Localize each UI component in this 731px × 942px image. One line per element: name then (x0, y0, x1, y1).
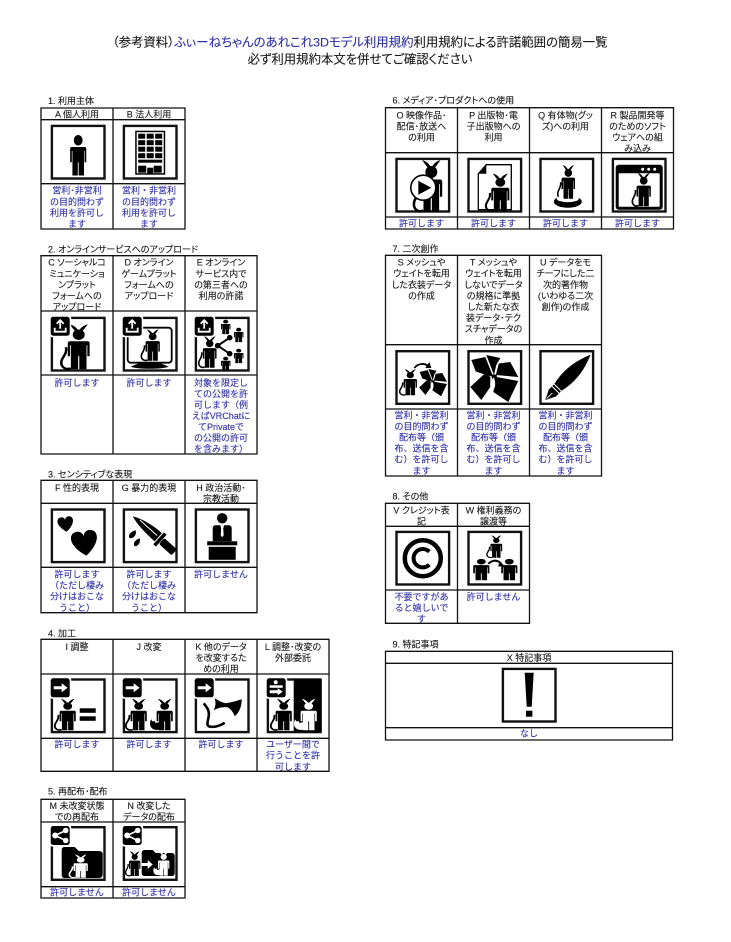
permission text: 行うことを許 (266, 750, 320, 761)
permission text: 分けはおこな (122, 592, 176, 602)
table grid (386, 503, 530, 623)
permission text: 営利・非営利 (122, 185, 176, 196)
column headers: の規格に準拠 (467, 290, 520, 301)
icon: building (124, 126, 176, 178)
permission text (399, 218, 660, 229)
column headers: の利用 (408, 132, 435, 142)
permission text: の目的問わず (122, 196, 176, 207)
column headers: R 製品開発等 (610, 109, 665, 120)
column headers (50, 800, 175, 822)
column headers: した新たな衣 (468, 301, 519, 312)
permission text: （ただし棲み (122, 580, 176, 590)
column headers: P 出版物･電 (469, 109, 518, 120)
column headers: G 暴力的表現 (122, 482, 176, 493)
table grid (41, 108, 185, 229)
column headers: データの配布 (123, 811, 175, 822)
permission text: 対象を限定し (194, 377, 248, 388)
permission text: す (417, 614, 426, 624)
column headers: スチャデータの (464, 323, 522, 334)
column headers: M 未改変状態 (50, 800, 104, 811)
column headers: T メッシュや (470, 258, 517, 268)
column headers: チーフにした二 (536, 269, 594, 279)
column headers (48, 258, 248, 312)
column headers: O 映像作品･ (396, 109, 447, 120)
table grid (41, 256, 257, 454)
panel: 9. 特記事項 (386, 638, 672, 740)
table grid (41, 480, 257, 613)
column headers: した衣装データ (392, 279, 451, 290)
column headers (396, 109, 666, 154)
column headers: 配信･放送へ (397, 120, 446, 131)
column headers: しないでデータ (464, 279, 523, 290)
heading: 5. 再配布･配布 (48, 786, 108, 796)
permission text: 許可します (615, 218, 660, 229)
permission text: ての公開を許 (194, 388, 248, 399)
column headers: アップロード (53, 302, 101, 312)
column headers (393, 504, 522, 526)
column headers: S メッシュや (398, 258, 446, 268)
permission text: 可します（例 (194, 399, 248, 410)
column headers: ゲームプラット (121, 268, 177, 279)
heading: 7. 二次創作 (392, 243, 439, 254)
permission text: なし (520, 729, 538, 739)
column headers: 子出版物への (467, 120, 521, 131)
permission text (50, 887, 176, 898)
permission text: 配布等（頒 (399, 432, 444, 442)
column headers: サービス内で (195, 268, 247, 279)
column headers: 装データ･テク (466, 312, 521, 323)
permission text: ます (140, 219, 158, 229)
heading: 2. オンラインサービスへのアップロード (48, 244, 198, 254)
column headers: H 政治活動･ (196, 482, 246, 493)
permission text: 許可します (543, 218, 588, 229)
heading: 4. 加工 (48, 628, 76, 638)
permission text: ます (556, 466, 575, 476)
column headers: F 性的表現 (55, 482, 99, 493)
table grid (41, 639, 329, 771)
column headers: ンプラット (58, 280, 96, 290)
panel: 3. センシティブな表現 (41, 468, 257, 613)
permission text: 許可しません (467, 591, 520, 602)
permission text (394, 409, 593, 476)
column headers: 譲渡等 (480, 515, 507, 526)
column headers: アップロード (125, 291, 173, 301)
permission text: の目的問わず (538, 420, 593, 431)
icon: outsourcing (265, 677, 322, 732)
icon: hearts (52, 510, 104, 562)
permission text: 許可しません (122, 887, 176, 898)
heading: 3. センシティブな表現 (48, 468, 132, 480)
column headers: W 権利義務の (466, 504, 522, 515)
permission text (394, 591, 520, 624)
icon: other data (193, 677, 248, 732)
table grid (41, 799, 185, 898)
icon: copyright (396, 532, 449, 584)
column headers: B 法人利用 (127, 109, 171, 120)
panel: 8. その他 (386, 490, 530, 624)
column headers: ズ)への利用 (542, 120, 589, 131)
permission text: む）を許可し (538, 454, 593, 465)
column headers: (いわゆる二次 (538, 290, 593, 301)
column headers: D オンライン (124, 258, 174, 268)
icon: upload to game (121, 315, 176, 370)
permission text (50, 568, 248, 613)
column headers: の第三者への (194, 279, 248, 290)
column headers: Q 有体物(グッ (538, 109, 593, 120)
permission text: 配布等（頒 (543, 432, 588, 442)
column headers: I 調整 (65, 641, 89, 652)
column headers: 記 (417, 516, 426, 526)
icon: podium speaker (196, 510, 248, 562)
icon: upload to social (49, 315, 104, 370)
permission text: の公開の許可 (194, 432, 248, 443)
permission text: ます (412, 466, 431, 476)
permission text: 布、送信を含 (394, 443, 449, 454)
column headers: フォームへの (52, 291, 102, 301)
icon: adjust (49, 677, 104, 732)
icon: outfit from mesh (396, 351, 449, 404)
icon: new outfit (468, 351, 521, 404)
column headers: 宗教活動 (203, 493, 239, 504)
column headers: 利用の許諾 (199, 290, 243, 301)
column headers (65, 641, 321, 674)
column headers: A 個人利用 (55, 109, 99, 120)
permission text: 許可しません (50, 887, 104, 898)
icon: distribute modified (121, 824, 176, 880)
permission text: 許可します (198, 739, 244, 750)
permission text: 許可します (54, 568, 100, 580)
table grid (386, 651, 672, 740)
permission text: を含みます） (194, 444, 248, 454)
permission text: 許可しません (194, 568, 248, 580)
column headers: 次的著作物 (543, 279, 588, 290)
title (112, 34, 608, 66)
column headers: み込み (624, 144, 651, 154)
permission text: 営利･非営利 (52, 185, 102, 196)
column headers: 利用 (484, 132, 503, 142)
column headers: ウェイトを転用 (465, 269, 522, 279)
column headers: V クレジット表 (393, 505, 450, 515)
column headers: での再配布 (55, 811, 99, 822)
icon: knife (124, 510, 180, 562)
column headers: U データをモ (540, 257, 591, 268)
permission text: 可します (275, 762, 311, 772)
permission text: 許可します (471, 218, 516, 229)
column headers: の作成 (408, 290, 435, 301)
column headers: を改変するた (195, 652, 247, 663)
permission text: 営利・非営利 (394, 409, 449, 420)
permission text: 許可します (54, 739, 100, 750)
icon: video (396, 159, 449, 212)
panel: 2. オンラインサービスへのアップロード (41, 244, 257, 454)
permission text: 分けはおこな (50, 592, 104, 602)
heading: 9. 特記事項 (392, 638, 439, 650)
column headers: ウェアへの組 (612, 132, 663, 142)
permission text: ます (484, 466, 503, 476)
permission text: えばVRChatに (192, 411, 250, 421)
column headers (55, 482, 246, 504)
permission text: 利用を許可し (50, 207, 104, 218)
title: （参考資料）ふぃーねちゃんのあれこれ3Dモデル利用規約利用規約による許諾範囲の簡易一覧 (112, 34, 608, 50)
permission text: 布、送信を含 (538, 443, 593, 454)
table grid (386, 108, 674, 229)
panel: 4. 加工 (41, 628, 329, 772)
column headers: ミュニケーショ (49, 269, 105, 279)
icon: fountain pen (540, 350, 595, 405)
panel: 6. メディア・プロダクトへの使用 (386, 94, 674, 229)
icon: exclamation (503, 669, 556, 722)
permission text: 営利・非営利 (538, 409, 593, 420)
column headers: フォームへの (124, 280, 174, 290)
permission text: 許可します (126, 739, 172, 750)
icon: goods figure (540, 159, 593, 212)
column headers: E オンライン (197, 258, 246, 268)
permission text: てPrivateで (198, 422, 244, 432)
permission text: の目的問わず (466, 420, 521, 431)
permission text: （ただし棲み (50, 580, 104, 590)
permission text: ユーザー間で (266, 740, 320, 750)
permission text: ます (68, 219, 86, 229)
permission text: 許可します (399, 218, 444, 229)
column headers: のためのソフト (609, 121, 666, 131)
column headers: ウェイトを転用 (393, 269, 450, 279)
permission text: の目的問わず (50, 196, 104, 207)
column headers (55, 109, 171, 120)
icon: third-party sharing (193, 315, 248, 370)
icon: transfer of rights (468, 532, 521, 584)
heading: 6. メディア･プロダクトへの使用 (392, 94, 514, 106)
permission text (50, 185, 176, 229)
title: 必ず利用規約本文を併せてご確認ください (248, 52, 472, 66)
permission text: 配布等（頒 (471, 432, 516, 442)
column headers: めの利用 (203, 663, 239, 674)
panel: 1. 利用主体 (41, 95, 185, 229)
permission text: うこと） (59, 603, 95, 613)
heading: 8. その他 (392, 490, 428, 502)
permission text: 許可します (54, 377, 100, 388)
permission text: 営利・非営利 (466, 409, 521, 420)
column headers: K 他のデータ (195, 641, 247, 652)
column headers: L 調整･改変の (265, 641, 321, 652)
table grid (386, 255, 602, 476)
icon: software window (613, 159, 666, 212)
column headers: 創作)の作成 (542, 301, 589, 312)
column headers (392, 257, 594, 345)
permission text: ると嬉しいで (395, 602, 448, 613)
panel: 5. 再配布・配布 (41, 786, 185, 898)
permission text: む）を許可し (466, 454, 521, 465)
icon: modify (121, 677, 176, 732)
permission text: 利用を許可し (122, 207, 176, 218)
permission text (54, 739, 320, 772)
permission text: 許可します (126, 377, 172, 388)
column headers: J 改変 (136, 641, 162, 652)
permission text: うこと） (131, 603, 167, 613)
icon: redistribute (49, 824, 104, 880)
permission text (54, 377, 250, 454)
panel: 7. 二次創作 (386, 243, 602, 476)
icon: person (52, 126, 104, 178)
permission text: 許可します (126, 568, 172, 580)
permission text: む）を許可し (394, 454, 449, 465)
permission text: 布、送信を含 (466, 443, 521, 454)
column headers: N 改変した (127, 800, 171, 811)
column headers: 作成 (484, 334, 503, 345)
heading: 1. 利用主体 (48, 95, 94, 106)
permission text: の目的問わず (394, 420, 449, 431)
column headers: 外部委託 (275, 652, 311, 663)
column header: X 特記事項 (507, 652, 551, 663)
column headers: C ソーシャルコ (48, 258, 106, 268)
permission text: 不要ですがあ (394, 591, 449, 602)
icon: printed matter (468, 159, 521, 212)
